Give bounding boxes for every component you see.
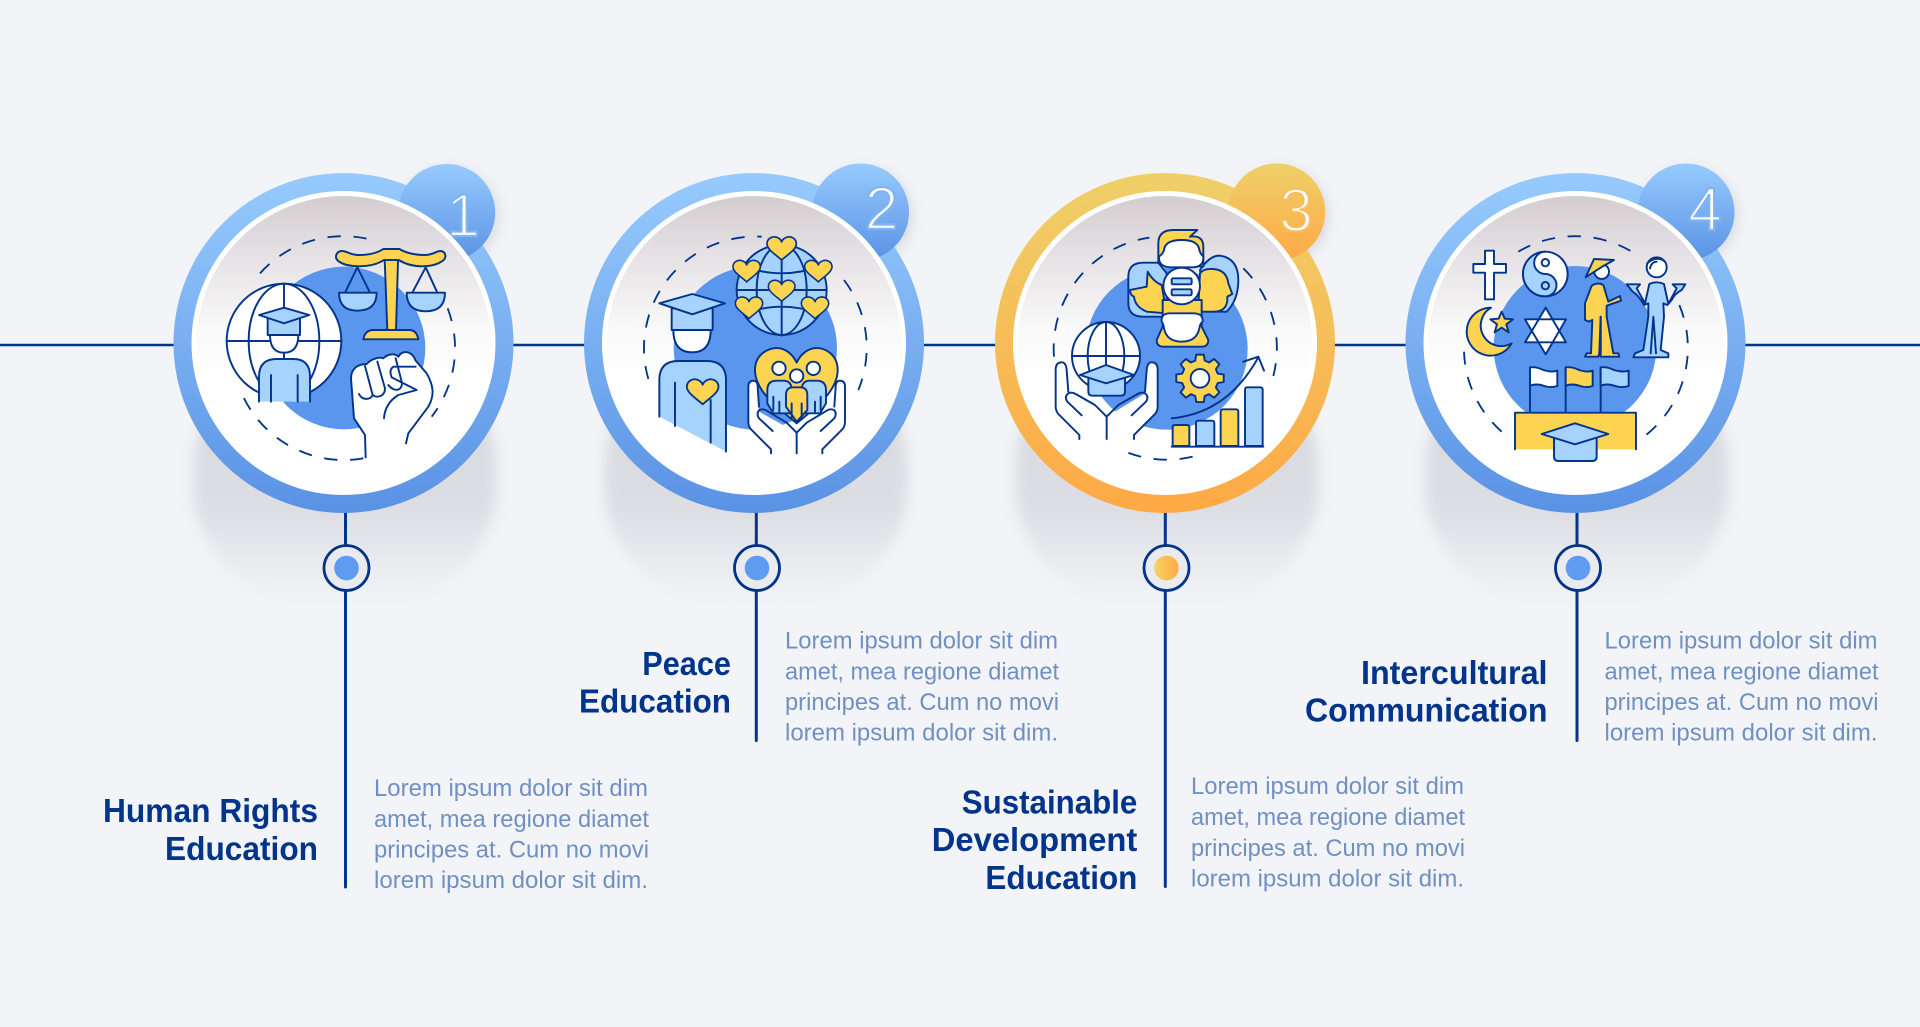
marker dot bbox=[1556, 546, 1600, 590]
panel: step 2 peace education bbox=[579, 164, 1059, 746]
number badge 2: 2 bbox=[865, 175, 898, 242]
connector line bbox=[1164, 505, 1167, 886]
icon: scales bbox=[336, 249, 445, 339]
text block: description 3: amet, mea regione diamet bbox=[1191, 804, 1465, 831]
horizontal timeline bbox=[0, 344, 1920, 346]
outer ring bbox=[584, 173, 924, 513]
heading: intercultural communication: Communication bbox=[1305, 692, 1548, 729]
text block: description 3 bbox=[1191, 773, 1465, 892]
icon: peace education bbox=[644, 237, 867, 455]
dashed orbit bbox=[1054, 238, 1277, 460]
outer ring bbox=[995, 173, 1335, 513]
inner shaded disc bbox=[1428, 196, 1722, 490]
icon: intercultural communication bbox=[1464, 236, 1688, 461]
number badge 1: 1 bbox=[446, 182, 480, 249]
icon: person with conical hat bbox=[1585, 259, 1621, 357]
badge shadow bbox=[1642, 169, 1736, 263]
connector line bbox=[1576, 505, 1578, 740]
blue backdrop bbox=[1086, 268, 1248, 430]
icon: globe with hearts bbox=[733, 237, 832, 336]
marker dot bbox=[324, 546, 369, 590]
number badge 1 bbox=[398, 164, 495, 261]
icon: cross bbox=[1473, 251, 1506, 299]
outer ring bbox=[174, 173, 514, 513]
marker dot bbox=[734, 546, 780, 590]
icon: growth bar chart bbox=[1172, 357, 1264, 447]
heading: peace education: Education bbox=[579, 682, 731, 720]
number badge 2 bbox=[812, 164, 909, 260]
heading: human rights education: Education bbox=[165, 830, 318, 867]
text block: description 3: lorem ipsum dolor sit dim. bbox=[1191, 866, 1464, 892]
dashed orbit bbox=[644, 237, 867, 390]
heading: peace education bbox=[579, 645, 731, 720]
panel: step 3 sustainable development education bbox=[932, 164, 1465, 896]
number badge 4 bbox=[1638, 164, 1734, 260]
icon: globe with graduate bbox=[227, 284, 342, 402]
icon: human rights bbox=[227, 236, 455, 460]
white disc bbox=[192, 191, 496, 495]
icon: globe and cap in hands bbox=[1056, 322, 1158, 440]
text block: description 3: Lorem ipsum dolor sit dim bbox=[1191, 773, 1464, 800]
panel: step 1 human rights education bbox=[103, 164, 649, 894]
inner shaded disc bbox=[1018, 196, 1312, 490]
badge shadow bbox=[1233, 169, 1327, 263]
heading: peace education: Peace bbox=[642, 645, 731, 682]
number badge 3: 3 bbox=[1279, 177, 1313, 244]
icon: person shrugging bbox=[1627, 257, 1685, 357]
marker dot bbox=[1144, 546, 1189, 590]
number badge 3 bbox=[1228, 164, 1325, 260]
badge shadow bbox=[817, 169, 911, 263]
icon: flags bbox=[1530, 367, 1629, 412]
circle shadow bbox=[604, 350, 908, 605]
heading: human rights education bbox=[103, 792, 318, 867]
icon: crescent and star bbox=[1467, 308, 1513, 356]
heading: sustainable development education: Education bbox=[985, 859, 1137, 896]
heading: sustainable development education: Sustainable bbox=[962, 784, 1137, 820]
white disc bbox=[1013, 191, 1317, 495]
circle shadow bbox=[1425, 350, 1729, 605]
heading: sustainable development education: Development bbox=[932, 821, 1137, 858]
badge shadow bbox=[403, 169, 497, 263]
dashed orbit bbox=[242, 236, 455, 460]
text block: description 4: Lorem ipsum dolor sit dim bbox=[1604, 628, 1878, 654]
text block: description 1: amet, mea regione diamet bbox=[374, 806, 649, 833]
heading: intercultural communication bbox=[1305, 654, 1548, 729]
icon: family in hands bbox=[748, 348, 845, 455]
number badge 4: 4 bbox=[1688, 176, 1722, 243]
outer ring bbox=[1406, 173, 1746, 513]
text block: description 1: Lorem ipsum dolor sit dim bbox=[374, 775, 648, 802]
icon: star of David bbox=[1525, 308, 1566, 354]
text block: description 1: lorem ipsum dolor sit dim. bbox=[374, 867, 648, 894]
text block: description 4: lorem ipsum dolor sit dim. bbox=[1604, 720, 1878, 746]
dashed orbit bbox=[1464, 236, 1688, 435]
icon: yin yang bbox=[1523, 252, 1568, 296]
text block: description 2: lorem ipsum dolor sit dim. bbox=[785, 720, 1058, 746]
icon: raised fist bbox=[351, 352, 433, 457]
text block: description 4 bbox=[1604, 628, 1879, 746]
circle shadow bbox=[1015, 350, 1319, 605]
white disc bbox=[1424, 191, 1728, 495]
text block: description 3: principes at. Cum no movi bbox=[1191, 835, 1465, 862]
icon: podium with cap bbox=[1515, 413, 1636, 461]
circle shadow bbox=[193, 350, 497, 605]
text block: description 1: principes at. Cum no movi bbox=[374, 836, 649, 864]
text block: description 2 bbox=[785, 628, 1059, 746]
heading: sustainable development education bbox=[932, 784, 1137, 896]
panel: step 4 intercultural communication bbox=[1305, 164, 1879, 746]
inner shaded disc bbox=[607, 196, 901, 490]
heading: human rights education: Human Rights bbox=[103, 792, 318, 829]
text block: description 4: principes at. Cum no movi bbox=[1604, 689, 1878, 716]
text block: description 2: amet, mea regione diamet bbox=[785, 658, 1059, 685]
connector line bbox=[755, 505, 758, 740]
text block: description 2: principes at. Cum no movi bbox=[785, 689, 1059, 716]
icon: gear bbox=[1176, 355, 1224, 402]
connector line bbox=[344, 505, 347, 887]
blue backdrop bbox=[674, 266, 837, 430]
icon: graduate with heart bbox=[659, 294, 726, 452]
white disc bbox=[602, 191, 906, 495]
text block: description 1 bbox=[374, 775, 649, 894]
icon: heads around equality sign bbox=[1128, 230, 1238, 347]
blue backdrop bbox=[263, 267, 425, 429]
blue backdrop bbox=[1494, 266, 1656, 429]
heading: intercultural communication: Intercultural bbox=[1361, 654, 1548, 691]
text block: description 2: Lorem ipsum dolor sit dim bbox=[785, 628, 1058, 654]
icon: sustainable development bbox=[1054, 230, 1277, 460]
text block: description 4: amet, mea regione diamet bbox=[1604, 658, 1879, 685]
inner shaded disc bbox=[196, 196, 490, 490]
